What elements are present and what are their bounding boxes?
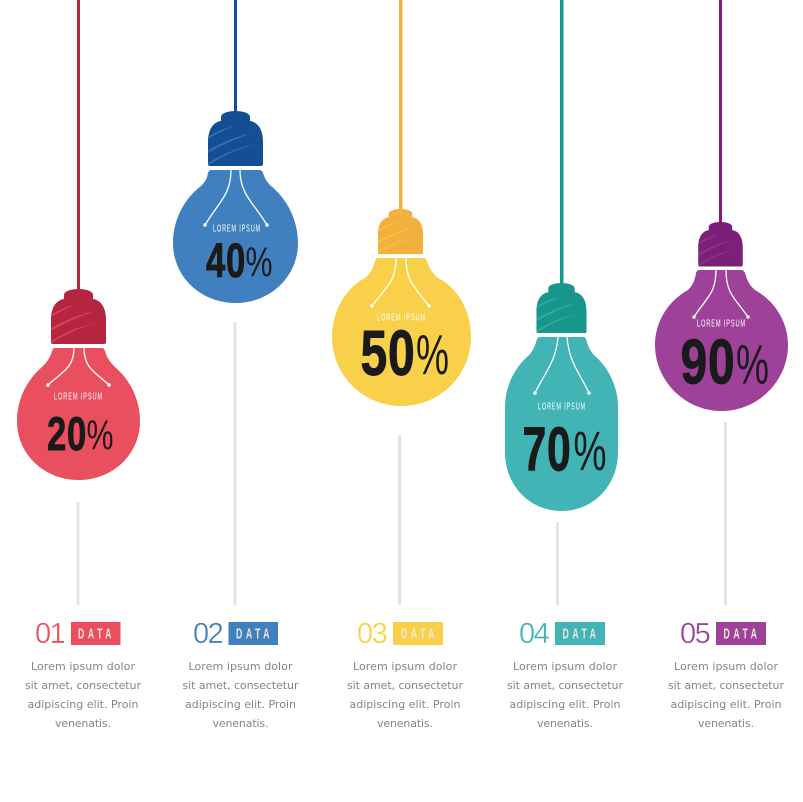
description 3: adipiscing elit. Proin [350, 698, 461, 711]
label 2: LOREM IPSUM [213, 224, 261, 234]
value 2: % [246, 238, 272, 286]
description 1: venenatis. [55, 717, 111, 730]
filament 5 [692, 270, 750, 319]
description 4: adipiscing elit. Proin [510, 698, 621, 711]
data tag 4: DATA [562, 626, 600, 642]
number 05: 05 [680, 618, 710, 650]
number 03: 03 [357, 618, 387, 650]
description 2: sit amet, consectetur [182, 679, 299, 692]
number 01: 01 [35, 618, 65, 650]
value 1: % [86, 412, 114, 458]
data tag 5: DATA [724, 626, 760, 642]
value 4: % [574, 419, 606, 482]
description 4: venenatis. [537, 717, 593, 730]
description 1 [25, 660, 141, 730]
column 4 caption [507, 618, 623, 730]
label 3: LOREM IPSUM [377, 312, 426, 324]
socket 1 [51, 289, 106, 344]
description 4: Lorem ipsum dolor [513, 660, 617, 673]
description 3: Lorem ipsum dolor [353, 660, 457, 673]
description 5: venenatis. [698, 717, 754, 730]
description 5 [668, 660, 784, 730]
description 1: adipiscing elit. Proin [28, 698, 139, 711]
glass 2 [173, 170, 298, 303]
value 4: 70 [522, 416, 572, 484]
description 3 [347, 660, 463, 730]
column 5 caption [668, 618, 784, 730]
label 4: LOREM IPSUM [538, 402, 586, 412]
filament 4 [533, 337, 591, 395]
column 1 caption [25, 618, 141, 730]
value 1: 20 [47, 407, 87, 460]
description 2 [182, 660, 299, 730]
socket 4 [536, 283, 587, 333]
filament 1 [46, 348, 111, 387]
filament 3 [370, 258, 431, 308]
value 2: 40 [206, 235, 246, 288]
description 4: sit amet, consectetur [507, 679, 623, 692]
filament 2 [203, 170, 269, 227]
socket 2 [208, 111, 263, 166]
bulb 4: teal 70% [505, 0, 618, 511]
label 5: LOREM IPSUM [697, 318, 746, 330]
description 5: Lorem ipsum dolor [674, 660, 778, 673]
socket 3 [378, 209, 423, 254]
label 1: LOREM IPSUM [54, 392, 103, 402]
description 2: adipiscing elit. Proin [185, 698, 296, 711]
description 1: sit amet, consectetur [25, 679, 141, 692]
description 5: sit amet, consectetur [668, 679, 784, 692]
socket 5 [698, 222, 743, 267]
description 4 [507, 660, 623, 730]
glass 5 [655, 270, 788, 411]
description 2: venenatis. [212, 717, 268, 730]
bulb 1: red 20% [17, 0, 140, 480]
value 5: % [736, 332, 769, 396]
description 1: Lorem ipsum dolor [31, 660, 135, 673]
data tag 2: DATA [236, 626, 273, 642]
value 3: % [416, 323, 449, 387]
data tag 1: DATA [78, 626, 115, 642]
description 3: sit amet, consectetur [347, 679, 463, 692]
description 3: venenatis. [377, 717, 433, 730]
column 3 caption [347, 618, 463, 730]
description 5: adipiscing elit. Proin [670, 698, 782, 711]
bulb 3: yellow 50% [332, 0, 471, 406]
bulb 2: blue 40% [173, 0, 298, 303]
value 3: 50 [360, 317, 416, 389]
description 2: Lorem ipsum dolor [188, 660, 293, 673]
value 5: 90 [680, 328, 736, 398]
glass 4 [505, 337, 618, 511]
data tag 3: DATA [401, 626, 438, 642]
glass 1 [17, 348, 140, 480]
column 2 caption [182, 618, 299, 730]
number 04: 04 [519, 618, 550, 650]
glass 3 [332, 258, 471, 406]
bulb 5: purple 90% [655, 0, 788, 411]
number 02: 02 [193, 618, 223, 650]
